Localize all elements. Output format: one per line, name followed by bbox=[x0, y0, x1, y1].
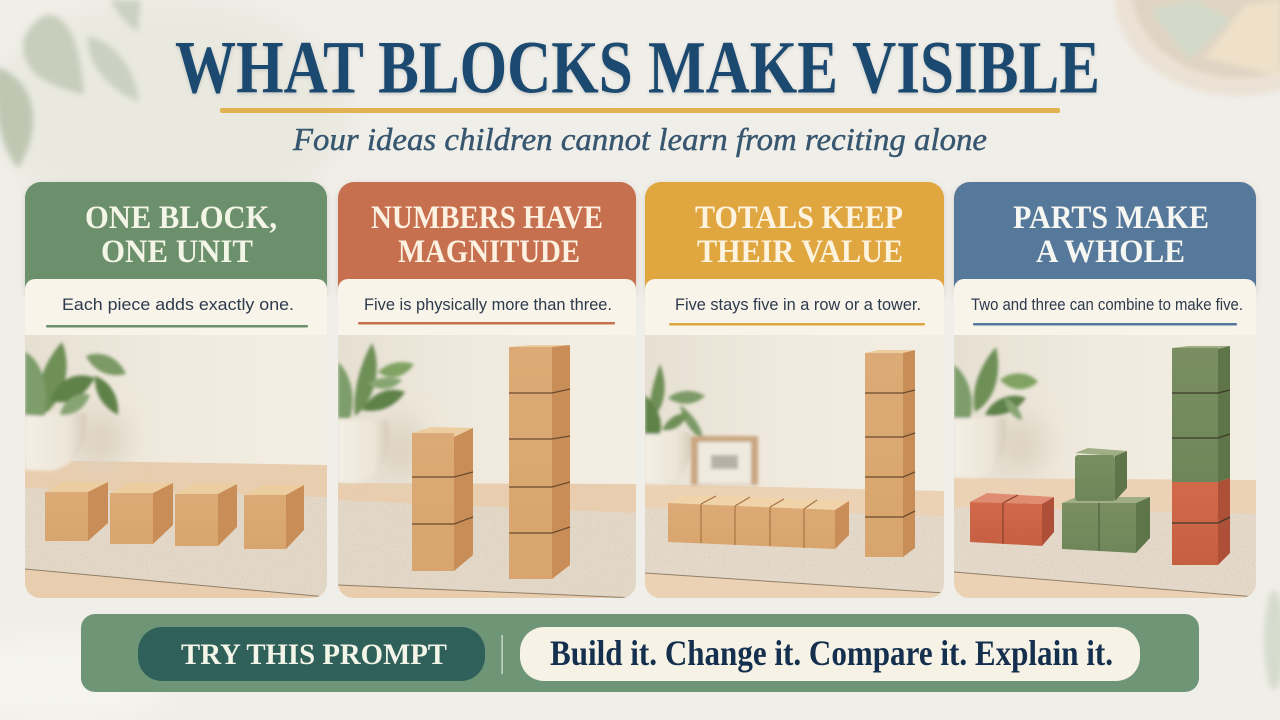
accent rule bbox=[358, 322, 615, 324]
panel: parts make a whole bbox=[954, 182, 1256, 600]
panel header bbox=[338, 182, 636, 302]
prompt label pill bbox=[138, 627, 485, 681]
panel: totals keep their value bbox=[645, 182, 944, 600]
description card bbox=[954, 279, 1256, 369]
heading bbox=[371, 200, 603, 270]
blocks: green group of three bbox=[1062, 448, 1150, 553]
blocks: tower of five bbox=[509, 345, 570, 579]
panel header bbox=[954, 182, 1256, 302]
icon: potted plant bbox=[645, 364, 705, 484]
heading: THEIR VALUE bbox=[697, 234, 903, 270]
heading bbox=[1013, 200, 1209, 270]
description: Five is physically more than three. bbox=[364, 295, 612, 314]
accent rule bbox=[46, 325, 308, 328]
heading: PARTS MAKE bbox=[1013, 200, 1209, 236]
panel: numbers have magnitude bbox=[338, 182, 636, 600]
accent rule bbox=[973, 323, 1237, 326]
prompt text pill bbox=[520, 627, 1140, 681]
description card bbox=[25, 279, 327, 369]
scene bbox=[645, 335, 944, 600]
blocks: mixed tower of five bbox=[1172, 346, 1230, 565]
accent rule bbox=[669, 323, 925, 326]
heading: ONE BLOCK, bbox=[85, 200, 277, 236]
scene bbox=[338, 335, 636, 600]
decorative bowl of blocks top right bbox=[1114, 0, 1280, 96]
description: Two and three can combine to make five. bbox=[971, 295, 1243, 314]
heading: NUMBERS HAVE bbox=[371, 200, 603, 236]
icon: potted plant bbox=[25, 342, 126, 471]
heading: ONE UNIT bbox=[101, 234, 253, 270]
panel: one block, one unit bbox=[25, 182, 327, 600]
subtitle: Four ideas children cannot learn from reciting alone bbox=[292, 121, 987, 157]
blocks: tower of three bbox=[412, 427, 473, 571]
prompt label: TRY THIS PROMPT bbox=[181, 638, 447, 671]
description: Each piece adds exactly one. bbox=[62, 295, 294, 314]
heading: TOTALS KEEP bbox=[695, 200, 903, 236]
divider bbox=[502, 635, 503, 674]
heading bbox=[695, 200, 903, 270]
scene bbox=[954, 335, 1256, 600]
decorative leaves top left bbox=[0, 0, 141, 168]
title: WHAT BLOCKS MAKE VISIBLE bbox=[175, 26, 1100, 110]
icon: potted plant bbox=[954, 347, 1044, 478]
blocks: row of four bbox=[45, 482, 304, 549]
scene bbox=[25, 335, 327, 600]
prompt text: Build it. Change it. Compare it. Explain it. bbox=[550, 633, 1113, 673]
heading: MAGNITUDE bbox=[398, 234, 580, 270]
description: Five stays five in a row or a tower. bbox=[675, 295, 921, 314]
soft blur bottom right bbox=[1264, 590, 1280, 690]
heading bbox=[85, 200, 277, 270]
prompt bar bbox=[81, 614, 1199, 692]
blocks: row of five bbox=[668, 495, 849, 549]
blocks: red pair bbox=[970, 493, 1054, 546]
panel header bbox=[25, 182, 327, 302]
icon: picture frame bbox=[691, 436, 758, 485]
panel header bbox=[645, 182, 944, 302]
description card bbox=[645, 279, 944, 369]
blocks: tower of five bbox=[865, 350, 915, 557]
heading: A WHOLE bbox=[1036, 234, 1185, 270]
description card bbox=[338, 279, 636, 369]
title underline bbox=[220, 108, 1060, 113]
icon: potted plant bbox=[338, 343, 424, 483]
